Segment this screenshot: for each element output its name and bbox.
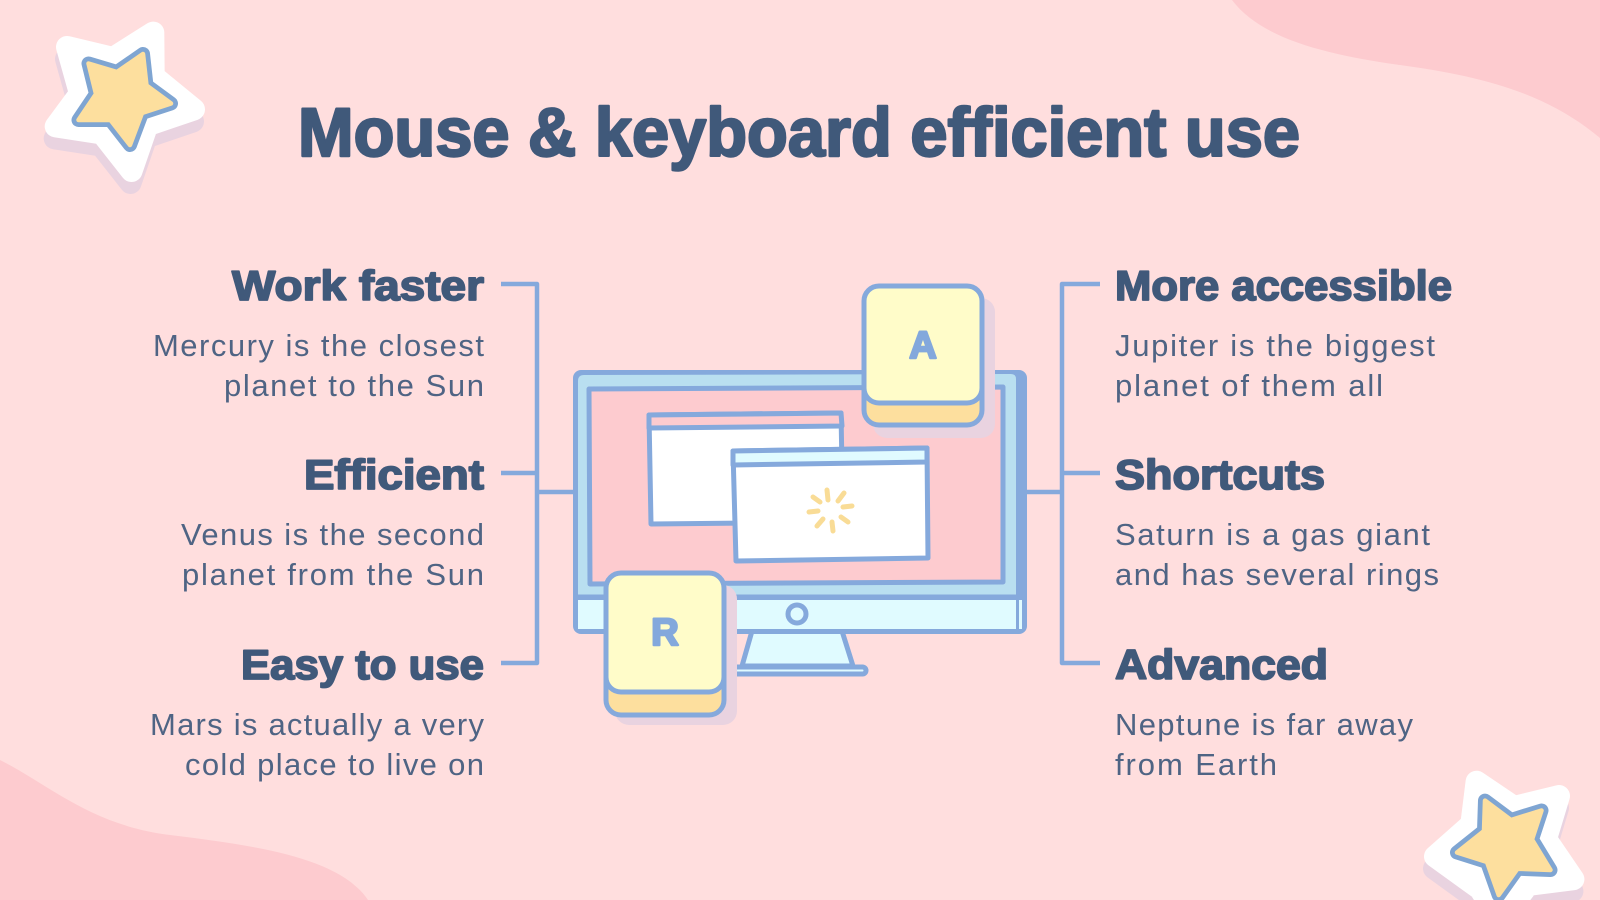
text block: Advanced xyxy=(1115,641,1414,782)
body: Venus: planet from the Sun xyxy=(182,557,484,592)
heading: Easy to use: Easy to use xyxy=(241,641,484,688)
text block: More accessible xyxy=(1115,262,1452,403)
connector: right bracket xyxy=(1027,284,1100,663)
heading: Shortcuts: Shortcuts xyxy=(1115,451,1325,498)
body: Mercury: planet to the Sun xyxy=(224,368,484,403)
body: Jupiter: planet of them all xyxy=(1115,368,1383,403)
icon: star top left xyxy=(55,33,194,183)
body: Saturn xyxy=(1115,517,1439,592)
body: Mercury xyxy=(153,328,484,403)
body: Neptune: from Earth xyxy=(1115,747,1277,782)
icon: loading spinner xyxy=(809,490,852,531)
illustration: computer with keys xyxy=(573,286,1027,725)
text block: Easy to use xyxy=(150,641,484,782)
body: Mars: cold place to live on xyxy=(185,747,484,782)
window front with spinner xyxy=(733,448,928,561)
key letter R: R xyxy=(651,612,679,654)
connector: left bracket xyxy=(501,284,573,663)
text block: Shortcuts xyxy=(1115,451,1439,592)
body: Saturn: Saturn is a gas giant xyxy=(1115,517,1430,552)
body: Mercury: Mercury is the closest xyxy=(153,328,484,363)
heading: Efficient: Efficient xyxy=(304,451,484,498)
heading: More accessible: More accessible xyxy=(1115,262,1452,309)
text block: Efficient xyxy=(181,451,484,592)
heading: Advanced: Advanced xyxy=(1115,641,1328,688)
monitor power button xyxy=(788,605,806,623)
body: Venus xyxy=(181,517,484,592)
key letter A: A xyxy=(909,325,937,367)
icon: star bottom right xyxy=(1434,782,1573,900)
body: Mars: Mars is actually a very xyxy=(150,707,484,742)
key A xyxy=(864,286,995,438)
monitor screen xyxy=(589,387,1003,584)
title: Mouse & keyboard efficient use xyxy=(298,94,1300,171)
background blob: bottom left xyxy=(0,760,368,900)
background blob: top right xyxy=(1232,0,1600,138)
body: Neptune xyxy=(1115,707,1414,782)
window back xyxy=(649,413,843,524)
key R xyxy=(606,573,737,725)
body: Mars xyxy=(150,707,484,782)
body: Neptune: Neptune is far away xyxy=(1115,707,1414,742)
heading: Work faster: Work faster xyxy=(232,262,484,309)
text block: Work faster xyxy=(153,262,484,403)
body: Venus: Venus is the second xyxy=(181,517,484,552)
monitor stand xyxy=(731,631,866,674)
body: Jupiter xyxy=(1115,328,1435,403)
monitor body xyxy=(573,370,1027,634)
body: Saturn: and has several rings xyxy=(1115,557,1439,592)
body: Jupiter: Jupiter is the biggest xyxy=(1115,328,1435,363)
